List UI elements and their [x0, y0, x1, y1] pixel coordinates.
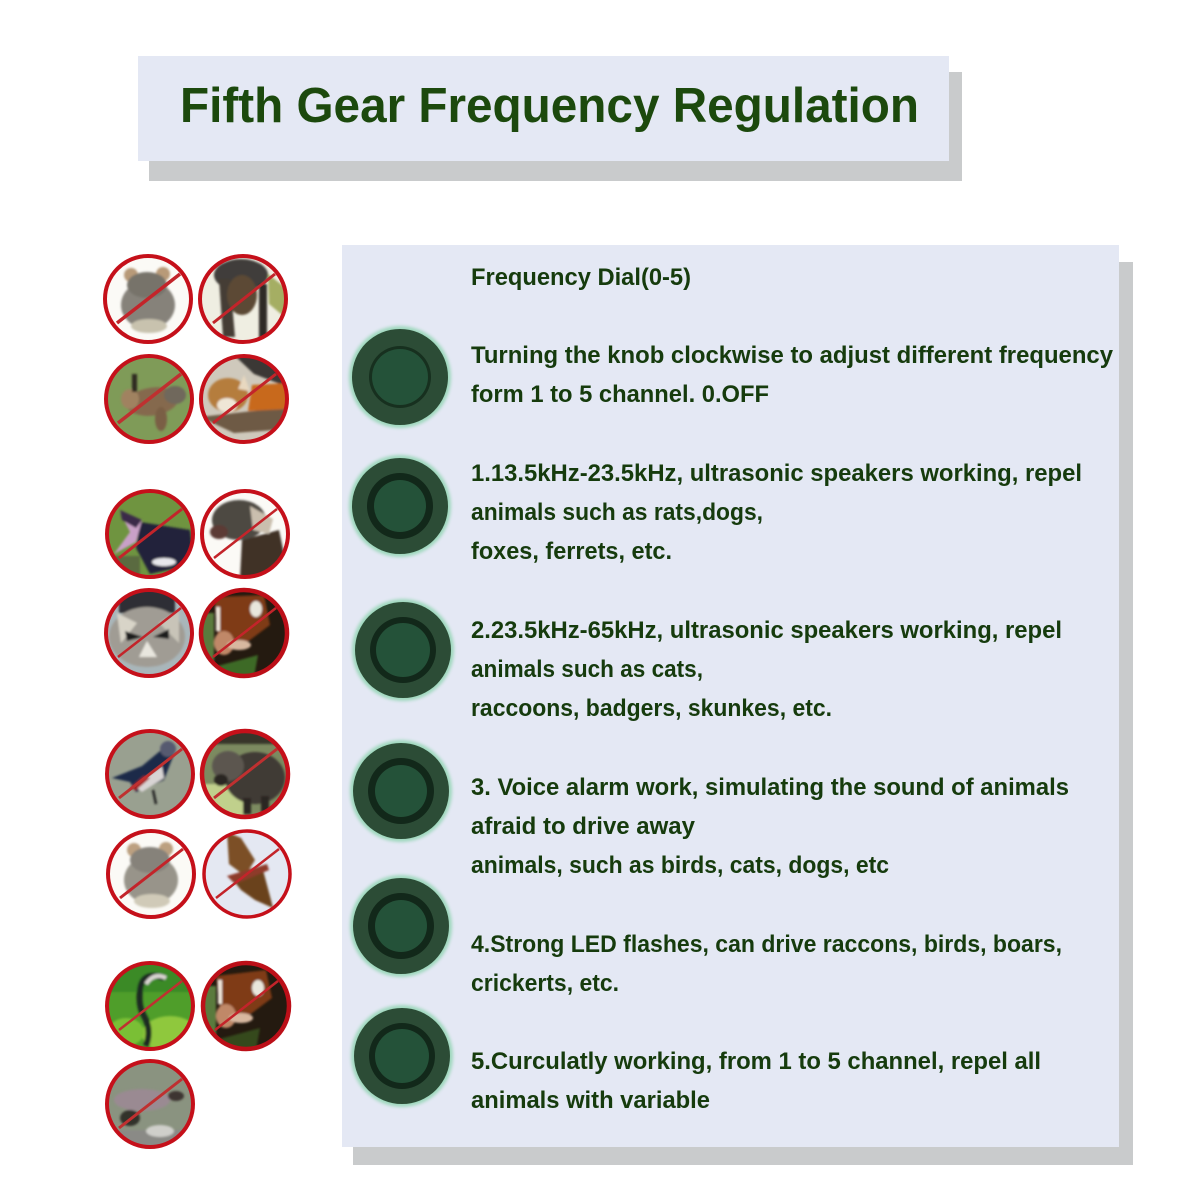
text: channel 1: foxes, ferrets, etc.: [471, 538, 672, 565]
knob 5: [351, 1005, 453, 1107]
icon: no badger: [106, 490, 194, 578]
icon: no dog: [199, 255, 287, 343]
text: channel 3: [471, 774, 1069, 879]
text: channel 2: 2.23.5kHz-65kHz, ultrasonic speakers working, repel: [471, 617, 1062, 644]
text: channel 3: animals, such as birds, cats, dogs, etc: [471, 852, 889, 879]
icon: no boar: [201, 730, 289, 818]
text: knob instructions: form 1 to 5 channel. 0.OFF: [471, 381, 769, 408]
icon: no bat: [203, 830, 291, 918]
title: Fifth Gear Frequency Regulation: [180, 79, 919, 133]
knob 3: [350, 740, 452, 842]
text: channel 3: afraid to drive away: [471, 813, 696, 840]
knob 1: [349, 455, 451, 557]
panel: frequency dial: [342, 245, 1133, 1165]
icon: no mouse: [107, 830, 195, 918]
icon: no red panda: [202, 962, 290, 1050]
knob 0: [349, 326, 451, 428]
text: channel 5: animals with variable: [471, 1087, 710, 1114]
text: channel 1: [471, 460, 1082, 565]
text: knob instructions: [471, 342, 1114, 408]
icon: no hare: [105, 355, 193, 443]
text: channel 5: [471, 1048, 1041, 1114]
text: channel 4: 4.Strong LED flashes, can drive raccons, birds, boars,: [471, 931, 1062, 958]
text: channel 2: raccoons, badgers, skunkes, etc.: [471, 695, 832, 722]
icon: no cat: [105, 589, 193, 677]
icon: no snake: [106, 962, 198, 1052]
text: channel 4: [471, 931, 1062, 997]
text: knob instructions: Turning the knob clockwise to adjust different frequency: [471, 342, 1114, 369]
text: channel 5: 5.Curculatly working, from 1 to 5 channel, repel all: [471, 1048, 1041, 1075]
text: channel 2: [471, 617, 1062, 722]
title banner: [138, 56, 962, 181]
knob 4: [350, 875, 452, 977]
icon: no cricket: [106, 1060, 194, 1148]
text: channel 1: 1.13.5kHz-23.5kHz, ultrasonic speakers working, repel: [471, 460, 1082, 487]
text: channel 1: animals such as rats,dogs,: [471, 499, 763, 526]
icon: no ferret: [201, 490, 289, 578]
knob 2: [352, 599, 454, 701]
icon: no fox: [200, 355, 288, 443]
text: frequency dial heading: Frequency Dial(0-5): [471, 264, 691, 291]
text: channel 3: 3. Voice alarm work, simulating the sound of animals: [471, 774, 1069, 801]
icon: no rat: [104, 255, 192, 343]
icon: no bird: [106, 730, 194, 818]
text: channel 4: crickerts, etc.: [471, 970, 619, 997]
icon: no red panda: [200, 589, 288, 677]
text: channel 2: animals such as cats,: [471, 656, 703, 683]
